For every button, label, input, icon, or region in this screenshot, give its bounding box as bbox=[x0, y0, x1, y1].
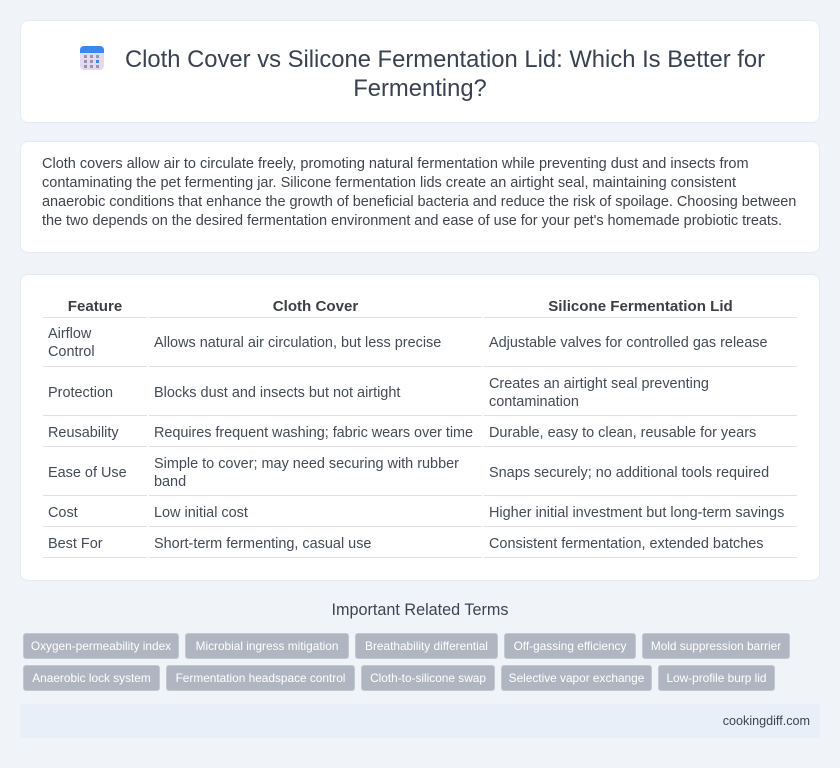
comparison table bbox=[43, 298, 797, 558]
row: airflow control: Adjustable valves for controlled gas release bbox=[489, 335, 767, 351]
icon: calendar bbox=[80, 46, 104, 70]
row: ease of use bbox=[48, 456, 769, 490]
related term tags: Low-profile burp lid bbox=[666, 671, 767, 685]
related term tags: Fermentation headspace control bbox=[176, 671, 345, 685]
row: protection bbox=[48, 376, 709, 410]
row: protection: contamination bbox=[489, 394, 579, 410]
row: cost: Cost bbox=[48, 505, 78, 521]
row: protection: Blocks dust and insects but not airtight bbox=[154, 385, 400, 401]
row: ease of use: Ease of Use bbox=[48, 465, 127, 481]
column headers: Silicone Fermentation Lid bbox=[548, 298, 733, 315]
description text: anaerobic conditions that enhance the growth of beneficial bacteria and reduce the risk of spoilage. Choosing between bbox=[42, 194, 796, 210]
heading: important related terms: Important Related Terms bbox=[332, 601, 508, 619]
panel: description bbox=[20, 141, 820, 253]
row: airflow control: Control bbox=[48, 344, 95, 360]
related term tags bbox=[23, 633, 790, 691]
column headers bbox=[68, 298, 733, 315]
row: cost: Low initial cost bbox=[154, 505, 248, 521]
column headers: Cloth Cover bbox=[273, 298, 358, 315]
row: airflow control: Airflow bbox=[48, 326, 91, 342]
related term tags: Microbial ingress mitigation bbox=[196, 639, 338, 653]
description text: Cloth covers allow air to circulate freely, promoting natural fermentation while preventing dust and insects from bbox=[42, 156, 749, 172]
row: airflow control: Allows natural air circulation, but less precise bbox=[154, 335, 441, 351]
related term tags: Oxygen-permeability index bbox=[31, 639, 171, 653]
row: airflow control bbox=[48, 326, 767, 360]
row: best for bbox=[48, 536, 763, 552]
title: Fermenting? bbox=[353, 75, 487, 102]
title bbox=[125, 46, 765, 102]
footer bar bbox=[20, 704, 820, 738]
row: ease of use: Snaps securely; no additional tools required bbox=[489, 465, 769, 481]
column headers: Feature bbox=[68, 298, 122, 315]
description text bbox=[42, 156, 796, 229]
related term tags: Breathability differential bbox=[365, 639, 488, 653]
description text: contaminating the pet fermenting jar. Silicone fermentation lids create an airtight seal, maintaining consistent bbox=[42, 175, 736, 191]
related term tags: Off-gassing efficiency bbox=[514, 639, 626, 653]
row: cost bbox=[48, 505, 784, 521]
description text: the two depends on the desired fermentation environment and ease of use for your pet's homemade probiotic treats. bbox=[42, 213, 782, 229]
row: reusability: Reusability bbox=[48, 425, 119, 441]
related term tags: Selective vapor exchange bbox=[509, 671, 644, 685]
row: ease of use: band bbox=[154, 474, 186, 490]
related term tags: Cloth-to-silicone swap bbox=[370, 671, 486, 685]
row: best for: Consistent fermentation, extended batches bbox=[489, 536, 763, 552]
row: reusability: Requires frequent washing; fabric wears over time bbox=[154, 425, 473, 441]
title: Cloth Cover vs Silicone Fermentation Lid: Which Is Better for bbox=[125, 46, 765, 73]
row: best for: Best For bbox=[48, 536, 103, 552]
panel: title card bbox=[20, 20, 820, 123]
related term tags: Mold suppression barrier bbox=[651, 639, 781, 653]
row: reusability bbox=[48, 425, 756, 441]
panel: comparison table bbox=[20, 274, 820, 581]
related term tags: Anaerobic lock system bbox=[32, 671, 151, 685]
footer source: cookingdiff.com bbox=[723, 714, 810, 728]
row: ease of use: Simple to cover; may need securing with rubber bbox=[154, 456, 459, 472]
row: best for: Short-term fermenting, casual use bbox=[154, 536, 371, 552]
row: cost: Higher initial investment but long-term savings bbox=[489, 505, 784, 521]
row: reusability: Durable, easy to clean, reusable for years bbox=[489, 425, 756, 441]
row: protection: Protection bbox=[48, 385, 113, 401]
row: protection: Creates an airtight seal preventing bbox=[489, 376, 709, 392]
